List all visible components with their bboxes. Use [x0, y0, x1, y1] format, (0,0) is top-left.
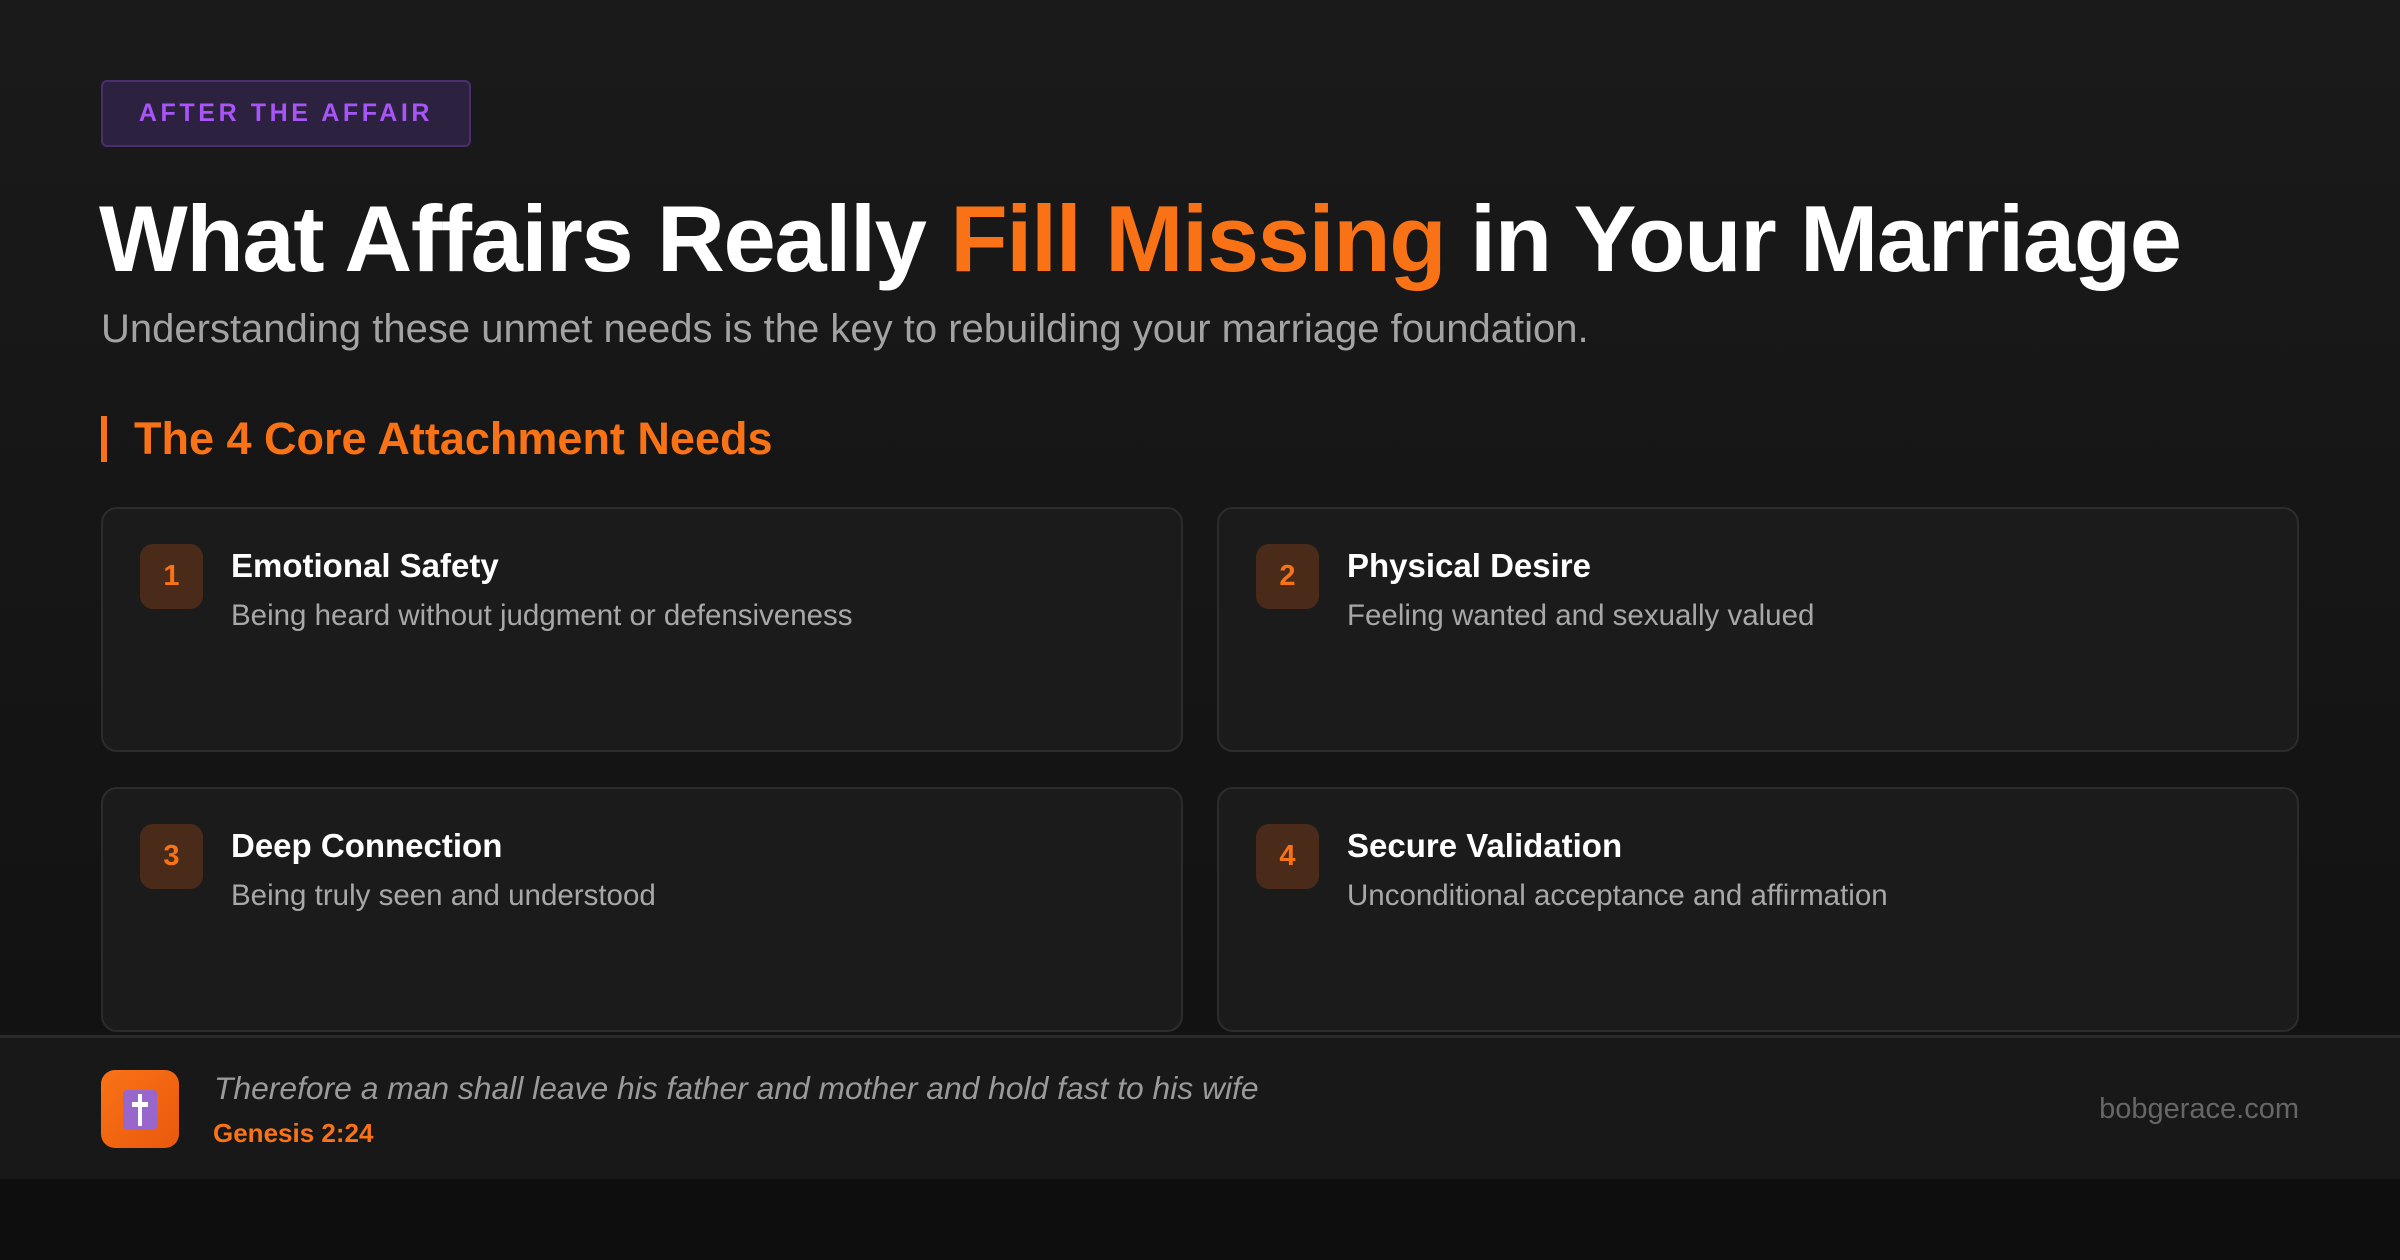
section heading: The 4 Core Attachment Needs [134, 413, 772, 464]
card 3 [101, 787, 1183, 1032]
number 3 [140, 824, 203, 889]
number 1: 1 [163, 560, 180, 592]
card 4 [1217, 787, 2299, 1032]
number 2 [1256, 544, 1319, 609]
icon: cross [101, 1070, 179, 1148]
site url: bobgerace.com [2099, 1093, 2299, 1125]
card desc 4: Unconditional acceptance and affirmation [1347, 879, 1888, 912]
badge [101, 80, 471, 147]
card desc 2: Feeling wanted and sexually valued [1347, 599, 1814, 632]
card title 1: Emotional Safety [231, 547, 499, 584]
card title 3: Deep Connection [231, 827, 502, 864]
card 1 [101, 507, 1183, 752]
card desc 1: Being heard without judgment or defensiveness [231, 599, 853, 632]
number 1 [140, 544, 203, 609]
reference: Genesis 2:24 [213, 1118, 373, 1148]
card 2 [1217, 507, 2299, 752]
badge: AFTER THE AFFAIR [139, 99, 433, 127]
title: What Affairs Really Fill Missing in Your Marriage [99, 186, 2181, 291]
number 3: 3 [163, 840, 180, 872]
card title 4: Secure Validation [1347, 827, 1622, 864]
card desc 3: Being truly seen and understood [231, 879, 656, 912]
number 4 [1256, 824, 1319, 889]
number 4: 4 [1279, 840, 1296, 872]
quote: Therefore a man shall leave his father and mother and hold fast to his wife [214, 1070, 1259, 1106]
footer [0, 1035, 2400, 1179]
number 2: 2 [1279, 560, 1296, 592]
card title 2: Physical Desire [1347, 547, 1591, 584]
subtitle: Understanding these unmet needs is the key to rebuilding your marriage foundation. [101, 307, 1589, 351]
